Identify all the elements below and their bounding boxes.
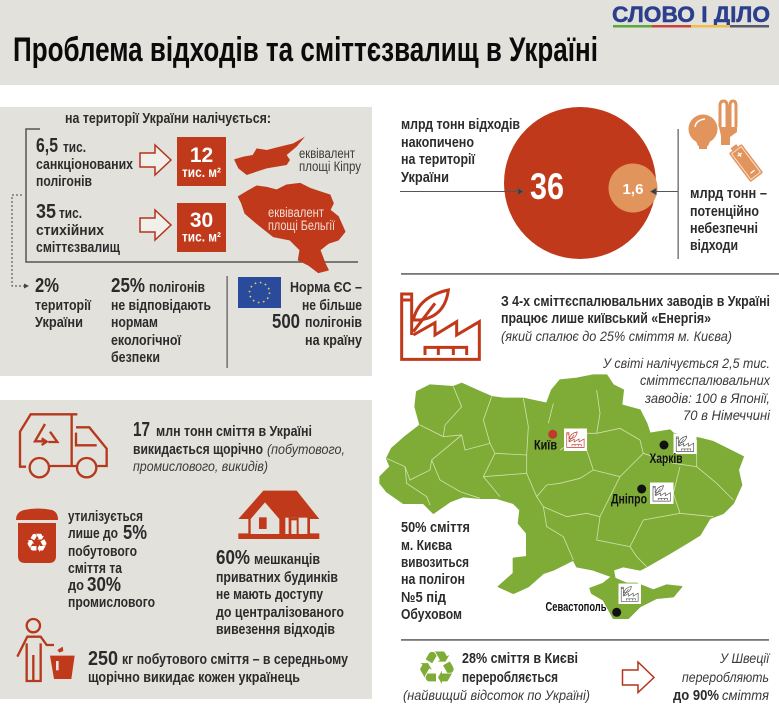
- divider: [678, 129, 679, 259]
- map: Belgium: [238, 183, 345, 273]
- Kyiv waste note: м. Києва: [401, 538, 453, 554]
- truck text: млн тонн сміття в Україні: [156, 424, 312, 440]
- arrow 1: [140, 145, 171, 175]
- per capita text: щорічно викидає кожен українець: [88, 670, 300, 686]
- EU norm: полігонів: [305, 315, 362, 331]
- truck text: промислового, викидів): [133, 458, 268, 474]
- icon: house: [238, 491, 319, 539]
- wild dumps text: сміттєзвалищ: [36, 240, 121, 256]
- header band: [0, 0, 779, 85]
- truck text: [133, 419, 345, 474]
- Kyiv recycling text: 28% сміття в Києві: [462, 651, 578, 667]
- divider: [401, 639, 769, 641]
- map: Cyprus: [234, 137, 305, 175]
- house text: приватних будинків: [216, 570, 338, 586]
- per capita text: [88, 648, 348, 686]
- house text: 60%: [216, 547, 250, 569]
- icon: recycling bin: [16, 508, 58, 563]
- Sweden recycling text: сміття: [722, 687, 769, 703]
- Kyiv waste note: 50% сміття: [401, 520, 470, 536]
- left pointer: [400, 188, 523, 194]
- city: Dnipro: [611, 482, 674, 506]
- accumulated waste text: млрд тонн відходів: [401, 117, 520, 133]
- hazardous waste text: потенційно: [690, 204, 759, 220]
- city: Sevastopol: Севастополь: [546, 599, 606, 614]
- map: Ukraine: [380, 375, 743, 618]
- truck text: (побутового,: [267, 441, 345, 457]
- sanctioned landfills text: 6,5: [36, 135, 58, 157]
- logo: СЛОВО І ДІЛО: [612, 2, 770, 27]
- recycling share text: утилізується: [68, 509, 143, 525]
- per capita text: кг побутового сміття – в середньому: [122, 652, 348, 668]
- connector arrow: [12, 195, 29, 288]
- panel heading: на території України налічується:: [65, 111, 271, 127]
- 2 percent: території: [35, 298, 92, 314]
- right pointer: [651, 188, 678, 194]
- per capita text: 250: [88, 648, 118, 670]
- sanctioned landfills text: полігонів: [36, 174, 92, 190]
- 25 percent: нормам: [111, 315, 158, 331]
- Belgium label: [268, 205, 335, 233]
- chart: 36 vs 1.6 billion tonnes: [400, 107, 678, 259]
- 25 percent: не відповідають: [111, 298, 211, 314]
- Sweden recycling text: переробляють: [682, 669, 769, 685]
- icon: bulbs and battery: [688, 101, 763, 182]
- house text: до централізованого: [216, 605, 344, 621]
- recycling share text: до: [68, 578, 84, 594]
- Belgium label: площі Бельгії: [268, 218, 335, 233]
- Kyiv recycling text: переробляється: [462, 670, 558, 686]
- 2 percent: України: [35, 315, 83, 331]
- icon: factory with leaf: [402, 290, 479, 359]
- EU norm: не більше: [302, 298, 362, 314]
- 25 percent: екологічної: [111, 333, 182, 349]
- Cyprus label: еквівалент: [299, 146, 355, 161]
- house text: не мають доступу: [216, 587, 323, 603]
- value 36: 36: [530, 166, 564, 207]
- hazardous waste text: млрд тонн –: [690, 186, 767, 202]
- city: Dnipro: Дніпро: [611, 492, 647, 506]
- accumulated waste text: на території: [401, 152, 476, 168]
- panel: landfill statistics: [0, 107, 372, 376]
- wild dumps text: тис.: [59, 206, 82, 222]
- red box 12: тис. м²: [182, 165, 221, 180]
- sanctioned landfills text: санкціонованих: [36, 157, 133, 173]
- Sweden recycling text: до 90%: [673, 688, 719, 704]
- recycling share text: 30%: [87, 574, 121, 596]
- world incineration note: 70 в Німеччині: [683, 407, 771, 423]
- truck text: викидається щорічно: [133, 442, 263, 458]
- arrow: [622, 662, 654, 692]
- EU norm: 500: [272, 311, 300, 333]
- accumulated waste text: [401, 117, 520, 186]
- recycling share text: 5%: [123, 522, 147, 544]
- sanctioned landfills text: тис.: [63, 140, 86, 156]
- icon: garbage truck: [20, 414, 107, 477]
- red box 30: [177, 203, 226, 252]
- accumulated waste text: України: [401, 170, 449, 186]
- Kyiv waste note: на полігон: [401, 572, 465, 588]
- red box 30: 30: [190, 209, 213, 232]
- recycling share text: [68, 509, 155, 611]
- truck text: 17: [133, 419, 150, 441]
- city: Kharkiv: Харків: [650, 451, 682, 466]
- arrow 2: [140, 210, 171, 240]
- 25 percent: [111, 275, 211, 366]
- red box 12: [177, 137, 226, 186]
- Kyiv recycling text: [403, 651, 590, 703]
- world incineration note: [602, 355, 771, 423]
- sanctioned landfills text: [36, 135, 133, 190]
- EU norm: Норма ЄС –: [290, 280, 362, 296]
- recycling share text: промислового: [68, 595, 155, 611]
- world incineration note: заводів: 100 в Японії,: [644, 390, 770, 406]
- divider: [401, 273, 779, 275]
- Cyprus label: [299, 146, 361, 174]
- Sweden recycling text: [673, 650, 771, 704]
- hazardous waste text: [690, 186, 767, 254]
- city: Kharkiv: [650, 434, 696, 466]
- red box 30: тис. м²: [182, 230, 221, 244]
- city: Kyiv: Київ: [534, 438, 557, 452]
- incineration plants text: (який спалює до 25% сміття м. Києва): [501, 328, 732, 344]
- Kyiv recycling text: (найвищий відсоток по Україні): [403, 687, 590, 703]
- large circle: [504, 107, 656, 259]
- hazardous waste text: відходи: [690, 238, 738, 254]
- EU norm: на країну: [305, 333, 362, 349]
- house text: вивезення відходів: [216, 622, 335, 638]
- wild dumps text: 35: [36, 201, 56, 223]
- 25 percent: безпеки: [111, 350, 160, 366]
- house text: [216, 547, 344, 638]
- 2 percent: 2%: [35, 275, 59, 297]
- panel: garbage facts: [0, 400, 372, 699]
- recycling share text: сміття та: [68, 561, 123, 577]
- Sweden recycling text: У Швеції: [719, 650, 771, 666]
- 25 percent: полігонів: [149, 280, 205, 296]
- 25 percent: 25%: [111, 275, 145, 297]
- 2 percent: [35, 275, 92, 331]
- Belgium label: еквівалент: [268, 205, 324, 220]
- divider: [226, 276, 228, 368]
- Kyiv waste note: [401, 520, 470, 623]
- accumulated waste text: накопичено: [401, 135, 474, 151]
- Cyprus label: площі Кіпру: [299, 159, 361, 174]
- icon: recycling symbol: ♻: [416, 641, 458, 695]
- icon: recycling bin: ♻: [25, 529, 49, 559]
- value 1.6: 1,6: [622, 181, 644, 198]
- bracket: [26, 129, 358, 262]
- city: Sevastopol: [546, 584, 641, 617]
- title: Проблема відходів та сміттєзвалищ в Україні: [13, 31, 598, 69]
- house text: мешканців: [254, 552, 320, 568]
- wild dumps text: [36, 201, 121, 256]
- red box 12: 12: [190, 144, 213, 167]
- Kyiv waste note: Обуховом: [401, 607, 462, 623]
- EU norm: [272, 280, 362, 349]
- wild dumps text: стихійних: [36, 223, 104, 239]
- city: Kyiv: [534, 428, 587, 452]
- small circle: [608, 164, 658, 212]
- incineration plants text: [501, 294, 770, 344]
- hazardous waste text: небезпечні: [690, 221, 758, 237]
- Kyiv waste note: №5 під: [401, 590, 446, 606]
- incineration plants text: працює лише київський «Енергія»: [501, 311, 711, 327]
- icon: person with trash can: [17, 619, 75, 681]
- recycling share text: лише до: [68, 526, 118, 542]
- world incineration note: сміттєспалювальних: [640, 372, 771, 388]
- icon: EU flag: [238, 277, 281, 308]
- Kyiv waste note: вивозиться: [401, 555, 469, 571]
- recycling share text: побутового: [68, 544, 137, 560]
